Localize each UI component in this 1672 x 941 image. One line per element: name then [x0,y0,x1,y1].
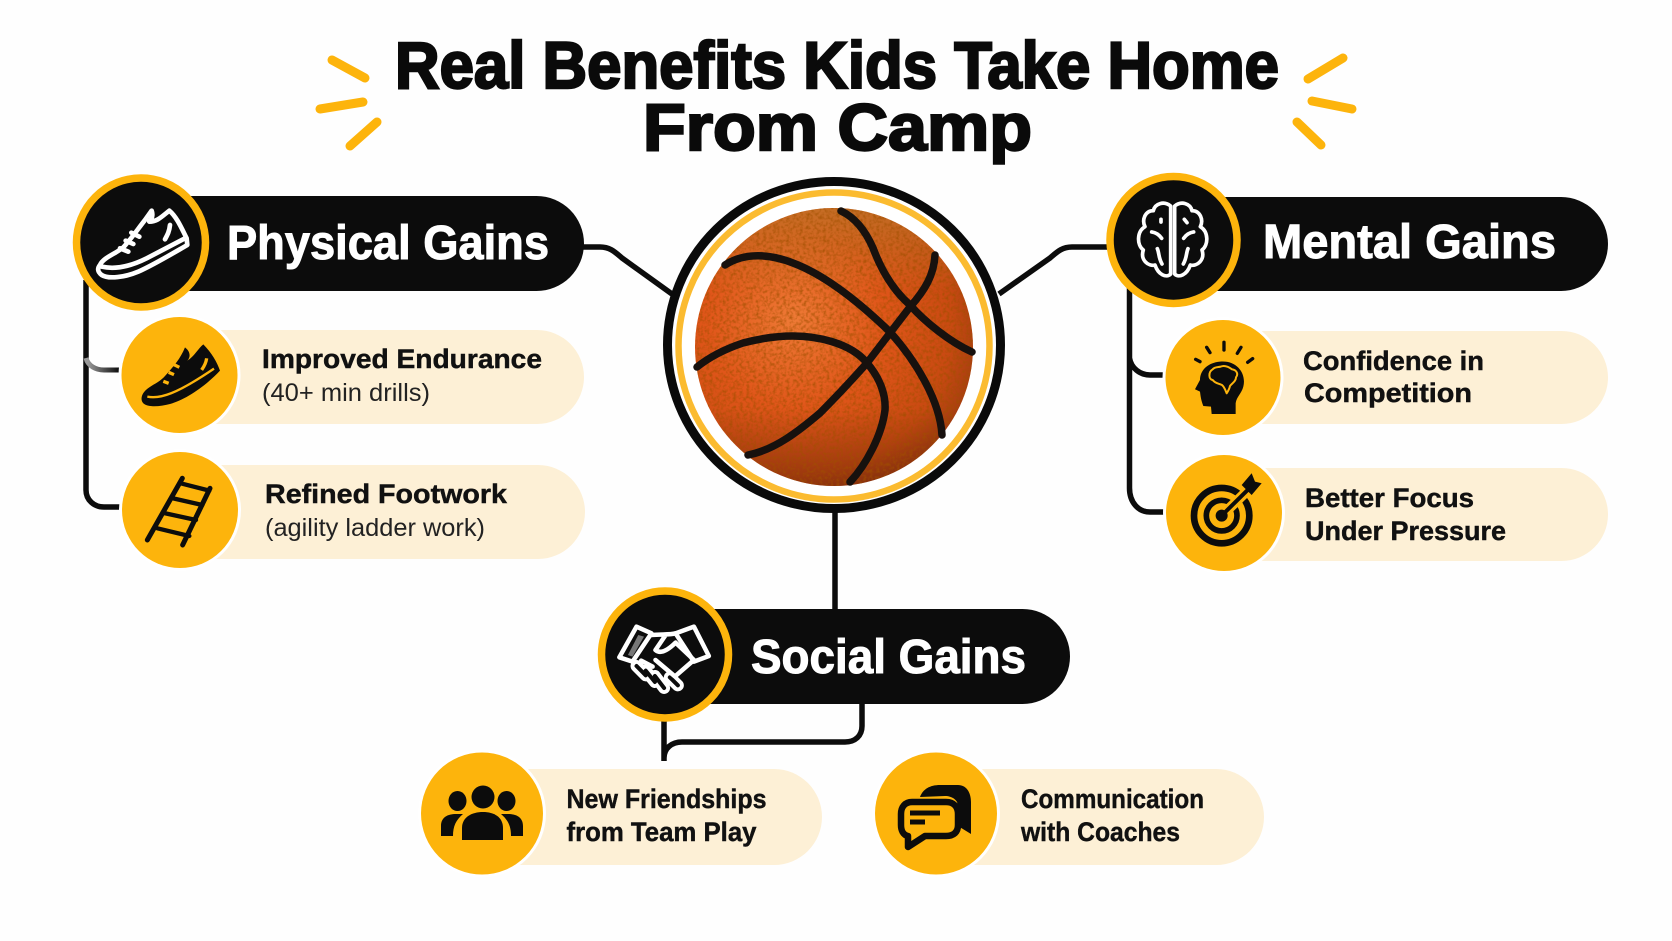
item: better focus under pressure: Better Focus [1305,483,1474,513]
item: confidence in competition [1162,317,1608,438]
heading pill [120,196,584,291]
panel: social gains [418,591,1264,878]
connector: ball to mental gains [999,247,1110,294]
connector: ball to social gains [832,510,838,612]
item: improved endurance: (40+ min drills) [262,379,430,407]
basketball [695,208,973,486]
connector: ball to physical gains [582,247,672,294]
heading text: Physical Gains [227,217,549,270]
yellow ring [678,192,990,500]
basketball emblem [668,182,1000,508]
title: Real Benefits Kids Take Home [395,28,1279,102]
decorative rays right of title [1297,58,1352,145]
item: better focus under pressure: Under Pressure [1305,516,1506,546]
item: improved endurance [118,314,584,436]
item: improved endurance: Improved Endurance [262,344,542,374]
heading pill [1150,197,1608,291]
item: communication with coaches: with Coaches [1020,817,1180,847]
title: From Camp [643,90,1032,164]
item: refined footwork [119,449,585,571]
connector trunk and branches [1130,280,1170,512]
item: communication with coaches [872,750,1264,878]
connector branch [86,358,122,370]
icon: sneaker solid [142,344,220,406]
icon: handshake [602,591,728,718]
title [395,28,1279,164]
connector to sub items [664,700,862,761]
icon: brain outline [1110,176,1237,304]
icon: chat bubbles [901,785,971,847]
heading text: Mental Gains [1263,216,1556,269]
heading pill [640,609,1070,704]
item: better focus under pressure [1163,452,1608,574]
item: confidence in competition: Confidence in [1303,346,1484,376]
item: new friendships: New Friendships [566,784,766,814]
item: refined footwork: (agility ladder work) [265,514,485,542]
item: refined footwork: Refined Footwork [265,479,508,509]
outer black ring [668,182,1000,508]
item: communication with coaches: Communication [1021,784,1204,814]
decorative rays left of title [320,60,377,146]
connector trunk [86,280,122,507]
icon: sneaker outline [76,178,206,307]
icon: target with arrow [1194,473,1262,543]
icon: group of people [441,786,523,840]
item: confidence in competition: Competition [1304,378,1472,408]
panel: mental gains [1110,176,1608,574]
item: new friendships [418,750,822,878]
item: new friendships: from Team Play [566,817,756,847]
icon: agility ladder [147,478,210,545]
icon: head with brain [1195,342,1253,414]
heading text: Social Gains [751,631,1026,684]
panel: physical gains [76,178,585,571]
